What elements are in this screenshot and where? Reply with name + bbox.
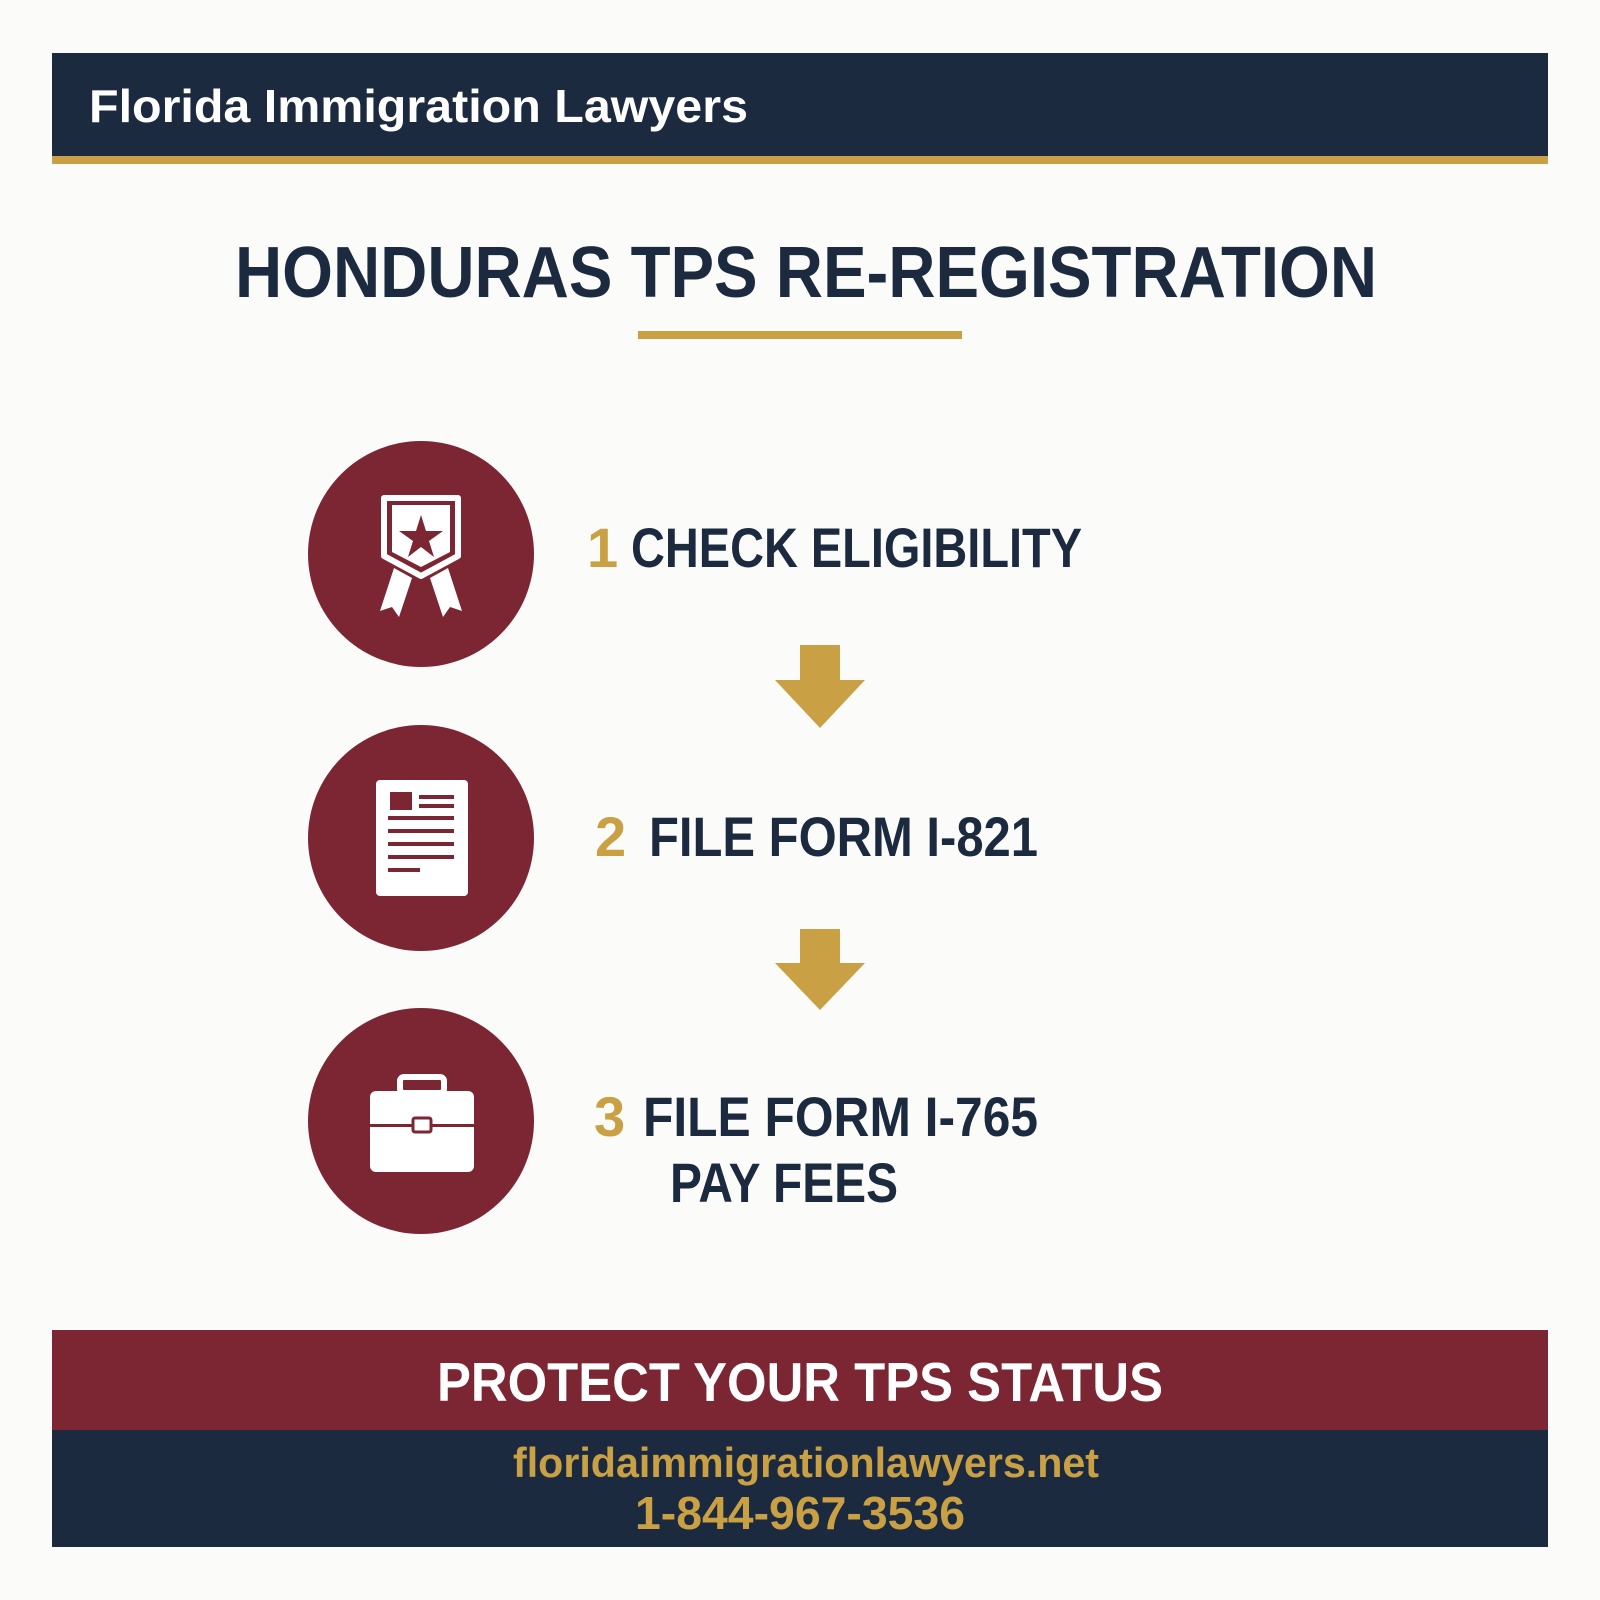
arrow 1 [775, 645, 865, 728]
phone: 1-844-967-3536 [635, 1487, 965, 1539]
step 3 label: 3 [594, 1085, 625, 1148]
icon: briefcase [308, 1008, 534, 1234]
step 1 label: CHECK ELIGIBILITY [631, 516, 1082, 579]
arrow 2 [775, 929, 865, 1010]
footer heading: PROTECT YOUR TPS STATUS [437, 1351, 1163, 1413]
header text: Florida Immigration Lawyers [89, 80, 748, 132]
website: floridaimmigrationlawyers.net [513, 1439, 1099, 1486]
step 3 label: PAY FEES [670, 1151, 898, 1214]
step 3 [308, 1008, 1038, 1234]
header bar [52, 53, 1548, 164]
step 2 label: FILE FORM I-821 [649, 805, 1038, 868]
icon: award badge [308, 441, 534, 667]
step 2 label: 2 [595, 805, 626, 868]
footer banner [52, 1330, 1548, 1430]
step 1 [308, 441, 1082, 667]
step 3 label [594, 1085, 1038, 1214]
step 1 label: 1 [587, 516, 618, 579]
title: HONDURAS TPS RE-REGISTRATION [235, 233, 1377, 313]
contact block [52, 1430, 1548, 1547]
step 2 [308, 725, 1038, 951]
step 3 label: FILE FORM I-765 [643, 1085, 1038, 1148]
icon: document [308, 725, 534, 951]
